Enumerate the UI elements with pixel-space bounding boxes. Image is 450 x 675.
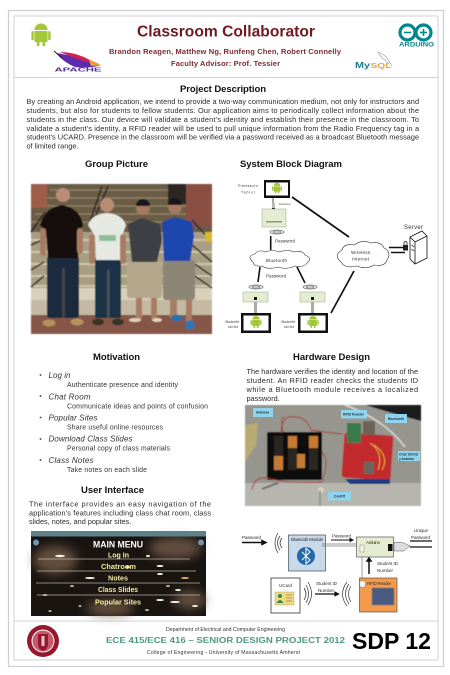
connector: tablet to module	[272, 198, 291, 211]
arrow: password input	[242, 540, 266, 544]
rfid reader: RFID Reader	[367, 581, 391, 586]
screenshot: main menu: MAIN MENU	[93, 540, 143, 550]
header divider	[14, 76, 438, 78]
professor tablet	[264, 180, 290, 198]
waves: bluetooth input	[275, 533, 282, 553]
text: project description	[26, 97, 420, 150]
cloud: bluetooth	[250, 250, 310, 268]
list: motivation: Popular Sites	[48, 414, 98, 422]
ucard: UCard	[279, 583, 292, 588]
label: student id lower	[316, 581, 338, 593]
photo: hardware: On/Off	[334, 494, 346, 498]
student tablet labels: tablet	[228, 325, 238, 329]
label: password to arduino: Password	[332, 534, 351, 538]
arrow: password to arduino	[331, 538, 353, 542]
list: motivation: Take notes on each slide	[67, 467, 147, 474]
label: student id right: Number	[377, 568, 393, 573]
title: Classroom Collaborator	[137, 24, 315, 40]
chart: hardware block diagram	[242, 528, 432, 613]
professor tablet label	[238, 184, 258, 194]
arrow: module to bluetooth	[270, 236, 272, 250]
icon: mysql logo: SQL	[370, 61, 392, 70]
icon: arduino logo	[399, 25, 434, 48]
text: project description: students in the class. Our device will validate a student's identity and establish their presence in the classroom. To	[26, 115, 419, 124]
cloud: wireless internet	[337, 241, 389, 268]
list: motivation: Personal copy of class materials	[67, 446, 171, 452]
list: motivation: Chat Room	[48, 392, 91, 402]
rfid reader	[360, 578, 397, 612]
arduino board: Arduino	[366, 540, 380, 545]
label: student id right: Student ID	[377, 561, 399, 566]
cloud: wireless internet: Internet	[352, 256, 370, 262]
screenshot: main menu: Chatroom	[101, 562, 136, 571]
authors: Brandon Reagen, Matthew Ng, Runfeng Chen, Robert Connelly	[109, 47, 342, 56]
text: hardware design: while a Bluetooth module receives a localized	[246, 385, 418, 394]
text: user interface: application's features including class chat room, class	[29, 508, 211, 518]
professor tablet label: Professor's	[238, 184, 258, 188]
screenshot: main menu: Log In	[108, 550, 129, 560]
label: student id lower: Student ID	[316, 581, 338, 586]
list: motivation: Class Notes	[48, 456, 94, 465]
photo: hardware	[245, 405, 421, 506]
icon: umass seal	[27, 625, 59, 657]
person 2	[95, 258, 121, 318]
arrow: student id up	[367, 558, 371, 574]
heading: user interface: User Interface	[81, 485, 144, 496]
label: server: Server	[404, 225, 423, 231]
footer divider	[14, 620, 438, 622]
student tablet left	[241, 313, 271, 333]
text: hardware design: The hardware verifies the identity and location of the	[246, 367, 418, 376]
wireless waves	[249, 230, 317, 289]
cloud: bluetooth: Bluetooth	[266, 258, 287, 263]
student tablet labels: tablet	[284, 325, 294, 329]
icon: mysql logo	[355, 52, 392, 70]
icon: android logo	[31, 24, 51, 46]
photo: group picture	[31, 184, 212, 334]
chart: system block diagram	[225, 180, 427, 333]
photo: hardware: RFID Reader	[343, 412, 365, 416]
faculty advisor: Faculty Advisor: Prof. Tessier	[171, 59, 280, 68]
arrows: unique password	[410, 541, 432, 547]
arrows: bluetooth to students	[258, 267, 305, 283]
screenshot: main menu: Notes	[108, 574, 128, 582]
student tablet labels: Student's	[281, 320, 295, 324]
arrows: tablets to internet	[292, 197, 354, 313]
photo: hardware: Bluetooth	[388, 417, 404, 421]
list: motivation: Log in	[48, 371, 71, 380]
cloud: wireless internet: Wireless	[351, 250, 371, 255]
heading: motivation: Motivation	[93, 352, 140, 363]
text: department: Department of Electrical and Computer Engineering	[166, 627, 285, 633]
icon: server	[410, 231, 427, 264]
label: student id right	[377, 561, 399, 573]
wires: module connections	[322, 544, 362, 578]
text: project description: student's UCARD. Presence in the classroom will be verified via a password received as a broadcast Bluetooth message	[26, 132, 419, 142]
icon: apache logo	[54, 51, 102, 74]
label: password upper: Password	[275, 238, 295, 244]
bluetooth module: professor	[262, 209, 286, 227]
text: college: College of Engineering - University of Massachusetts Amherst	[147, 650, 301, 656]
photo: hardware: Chat Shield	[399, 452, 418, 456]
icon: lock	[403, 242, 408, 250]
text: project description: validate a student's identity, a RFID reader will be used to pull unique information from the Radio Frequency tag in a	[26, 124, 420, 133]
professor tablet label: Tablet	[241, 190, 255, 194]
label: unique password	[411, 528, 430, 540]
bluetooth module: Bluetooth Module	[291, 537, 323, 542]
text: project description: By creating an Android application, we intend to provide a two-way communication medium, not only for instructors and	[26, 97, 419, 106]
heading: group picture: Group Picture	[85, 159, 148, 170]
bluetooth module	[288, 535, 326, 571]
student tablet labels	[225, 320, 295, 329]
list: motivation: Communicate ideas and points of confusion	[67, 404, 208, 410]
icon: arduino logo: ARDUINO	[399, 42, 434, 48]
photo: hardware: y Arduino	[399, 457, 414, 461]
list: motivation: Share useful online resources	[67, 424, 164, 432]
text: sdp 12: SDP 12	[352, 628, 431, 654]
label: student id lower: Number	[318, 588, 334, 593]
label: unique password: Password	[411, 535, 430, 540]
photo: hardware: Antenna	[256, 410, 269, 414]
person 1	[47, 256, 79, 318]
arrows: internet to server	[389, 248, 405, 252]
list: motivation: Authenticate presence and identity	[67, 382, 179, 389]
screenshot: main menu: Class Slides	[98, 585, 138, 594]
heading: hardware design: Hardware Design	[293, 352, 370, 363]
text: hardware design: student. An RFID reader checks the students ID	[246, 376, 418, 385]
screenshot: main menu	[31, 531, 206, 616]
text: hardware design: password.	[246, 394, 280, 403]
student tablet right	[298, 313, 328, 333]
text: user interface	[29, 500, 211, 526]
text: hardware design	[246, 367, 418, 403]
student tablet labels: Student's	[225, 320, 239, 324]
icon: apache logo: APACHE	[54, 68, 102, 74]
ucard	[271, 578, 300, 613]
text: user interface: The interface provides an easy navigation of the	[29, 500, 211, 508]
text: project description: students, but also for students to fellow students. Our application aims to periodically collect information about the	[26, 106, 419, 115]
text: course title: ECE 415/ECE 416 – SENIOR DESIGN PROJECT 2012	[106, 636, 346, 645]
label: password input: Password	[242, 535, 261, 540]
person 3	[136, 295, 142, 319]
list: motivation: Download Class Slides	[48, 434, 132, 444]
arduino board	[356, 537, 394, 557]
icon: usb plug	[394, 542, 410, 551]
icon: mysql logo: My	[355, 61, 371, 70]
bluetooth modules: students	[243, 292, 325, 302]
person 4	[170, 298, 177, 318]
arrow: student id lower	[315, 592, 338, 596]
screenshot: main menu: Popular Sites	[95, 598, 141, 606]
label: unique password: Unique	[414, 528, 428, 533]
text: project description: of limited range.	[26, 142, 78, 150]
connector: tablet to module: Password	[279, 202, 291, 206]
label: password lower: Password	[266, 274, 286, 278]
text: user interface: slides, notes, and popular sites.	[29, 517, 131, 526]
heading: system block diagram: System Block Diagram	[240, 159, 342, 170]
heading: project description: Project Description	[180, 84, 266, 95]
list: motivation	[40, 371, 208, 474]
connectors: students	[254, 297, 314, 313]
waves: card and reader	[304, 582, 351, 606]
